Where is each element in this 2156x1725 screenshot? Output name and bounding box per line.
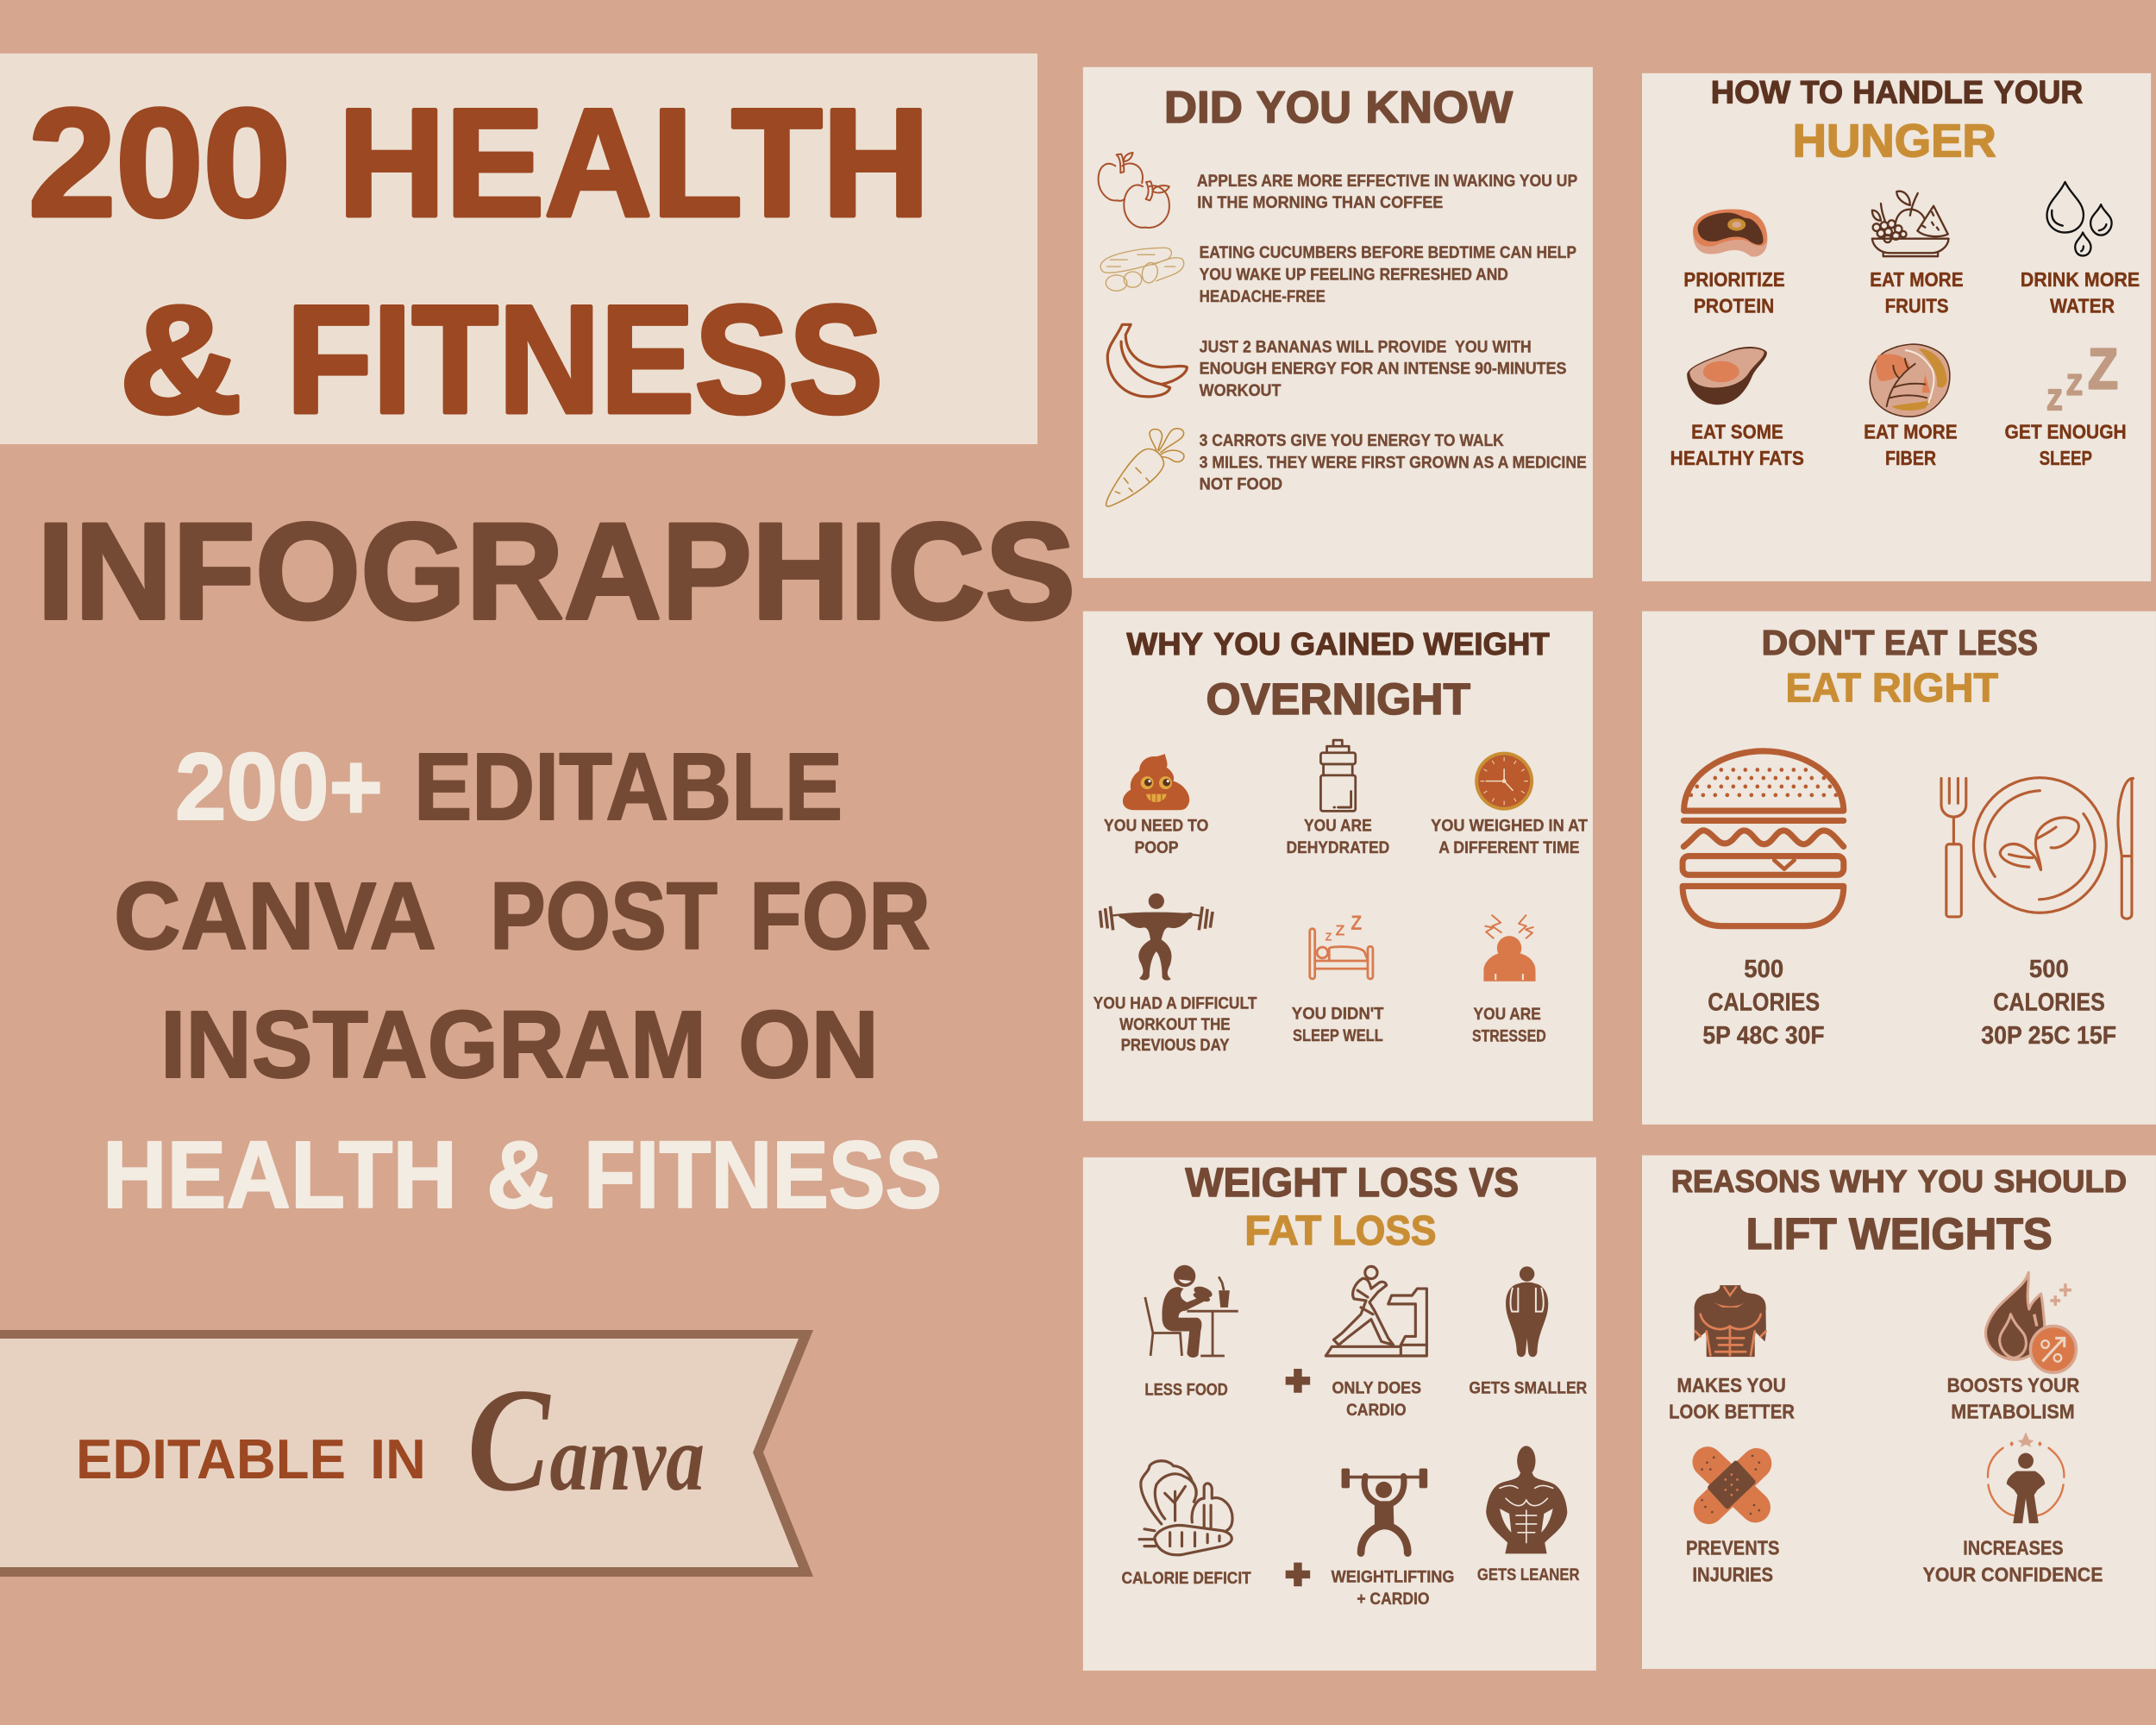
label: weightlifting + cardio — [1332, 1568, 1454, 1609]
panel: did you know — [1083, 67, 1593, 578]
text: bananas fact: WORKOUT — [1200, 381, 1282, 400]
panel heading: YOU — [1213, 626, 1281, 662]
title line 1: HEALTH — [338, 77, 930, 248]
icon: weightlifter — [1342, 1468, 1427, 1553]
label: you are stressed: YOU ARE — [1474, 1005, 1541, 1024]
label: boosts your metabolism: METABOLISM — [1951, 1401, 2075, 1423]
editable in label: EDITABLE — [76, 1427, 346, 1490]
subheading line 2 — [114, 863, 931, 969]
icon: person eating — [1145, 1265, 1238, 1358]
panel heading: DID — [1164, 83, 1243, 133]
subheading line 2: POST — [490, 863, 718, 969]
label: get enough sleep: GET ENOUGH — [2005, 420, 2127, 442]
icon: water bottle — [1320, 740, 1356, 811]
label: only does cardio — [1332, 1378, 1421, 1420]
panel heading: EAT — [1884, 624, 1947, 662]
panel heading: WEIGHT — [1185, 1160, 1346, 1206]
label: prevents injuries: PREVENTS — [1686, 1536, 1779, 1559]
label: less food: LESS FOOD — [1144, 1380, 1228, 1399]
text: burger calories: 500 — [1744, 956, 1783, 983]
label: you are dehydrated: DEHYDRATED — [1286, 838, 1389, 857]
text: cucumbers fact: YOU WAKE UP FEELING REFRESHED AND — [1200, 266, 1508, 285]
text: burger calories: 5P 48C 30F — [1702, 1022, 1825, 1050]
icon: carrot — [1106, 429, 1184, 506]
text: carrots fact: 3 MILES. THEY WERE FIRST GROWN AS A MEDICINE — [1200, 453, 1587, 472]
icon: vegetables — [1139, 1461, 1232, 1555]
panel heading: YOU — [1257, 83, 1351, 133]
icon: apples — [1099, 153, 1169, 228]
panel heading: SHOULD — [1994, 1164, 2127, 1199]
subheading line 4: HEALTH — [103, 1122, 457, 1228]
label: drink more water — [2021, 268, 2140, 317]
icon: plus — [1286, 1563, 1310, 1586]
label: increases your confidence: INCREASES — [1963, 1536, 2064, 1559]
panel highlight heading — [1785, 664, 1998, 711]
label: prevents injuries — [1686, 1536, 1779, 1585]
panel: reasons why you should lift weights — [1642, 1155, 2156, 1669]
panel background — [1642, 1155, 2156, 1669]
panel heading — [1671, 1164, 2127, 1199]
label: prioritize protein: PROTEIN — [1694, 294, 1774, 317]
text: burger calories: CALORIES — [1708, 988, 1820, 1016]
label: increases your confidence: YOUR CONFIDENCE — [1923, 1563, 2103, 1585]
label: you are stressed: STRESSED — [1472, 1026, 1546, 1045]
panel heading: HANDLE — [1852, 74, 1984, 110]
panel highlight heading: FAT — [1244, 1208, 1321, 1254]
panel heading: WHY — [1126, 626, 1203, 662]
panel heading — [1711, 74, 2083, 110]
icon: sleep zzz: Z — [2047, 384, 2062, 416]
icon: bed: Z — [1326, 932, 1332, 944]
ribbon border — [0, 1330, 813, 1577]
subheading line 4: FITNESS — [584, 1122, 942, 1228]
panel heading: REASONS — [1671, 1164, 1821, 1199]
icon: bananas — [1107, 324, 1187, 397]
label: gets leaner: GETS LEANER — [1477, 1565, 1580, 1584]
title line 1 — [28, 77, 930, 248]
subheading line 4: & — [486, 1122, 555, 1228]
panel highlight heading: HUNGER — [1793, 116, 1996, 166]
panel background — [1642, 612, 2156, 1125]
text: plate calories: CALORIES — [1993, 988, 2105, 1016]
label: eat more fiber — [1864, 420, 1958, 469]
icon: stressed person — [1483, 915, 1536, 982]
subheading line 1: 200+ — [175, 734, 383, 840]
icon: flame metabolism — [1986, 1273, 2076, 1372]
icon: weightlifter — [1100, 894, 1213, 981]
icon: bed: Z — [1351, 913, 1362, 935]
text: cucumbers fact: HEADACHE-FREE — [1200, 287, 1326, 306]
icon: plate and cutlery — [1941, 778, 2134, 919]
label: prioritize protein: PRIORITIZE — [1683, 268, 1785, 291]
subheading line 2: CANVA — [114, 863, 436, 969]
label: eat more fruits: EAT MORE — [1870, 268, 1964, 291]
label: eat some healthy fats: EAT SOME — [1691, 420, 1783, 442]
panel highlight heading — [1746, 1208, 2053, 1258]
text: plate calories — [1981, 956, 2116, 1050]
panel highlight heading: EAT — [1785, 664, 1861, 711]
icon: fruit bowl — [1872, 191, 1949, 256]
text: bananas fact: ENOUGH ENERGY FOR AN INTENSE 90-MINUTES — [1200, 360, 1567, 379]
ribbon: editable in canva — [0, 1330, 813, 1577]
text: apples fact: APPLES ARE MORE EFFECTIVE IN WAKING YOU UP — [1197, 172, 1577, 191]
subheading line 3: INSTAGRAM — [160, 992, 706, 1098]
panel heading: YOUR — [1994, 74, 2083, 110]
title panel — [0, 53, 1037, 444]
panel heading: TO — [1801, 74, 1843, 110]
panel heading: WEIGHT — [1423, 626, 1550, 662]
label: you had a difficult workout — [1094, 995, 1257, 1055]
text: plate calories: 500 — [2029, 956, 2069, 983]
panel highlight heading: RIGHT — [1872, 664, 1998, 711]
canva wordmark: Canva — [467, 1358, 705, 1522]
icon: sleep zzz — [2047, 337, 2118, 416]
panel heading: LESS — [1958, 624, 2038, 662]
subheading line 1 — [175, 734, 843, 840]
text: bananas fact: JUST 2 BANANAS WILL PROVIDE YOU WITH — [1200, 337, 1532, 356]
label: you had a difficult workout: PREVIOUS DAY — [1121, 1037, 1230, 1055]
subheading line 1: EDITABLE — [414, 734, 843, 840]
panel: weight loss vs fat loss — [1083, 1157, 1596, 1671]
label: you didn't sleep well: YOU DIDN'T — [1292, 1005, 1384, 1024]
title block: 200 health and fitness — [0, 53, 1037, 445]
text: cucumbers fact: EATING CUCUMBERS BEFORE BEDTIME CAN HELP — [1200, 243, 1576, 262]
label: makes you look better — [1669, 1374, 1795, 1423]
label: you weighed in at a different time: A DIFFERENT TIME — [1438, 838, 1580, 857]
subheading line 2: FOR — [749, 863, 931, 969]
panel highlight heading: WEIGHTS — [1849, 1208, 2053, 1258]
text: carrots fact: NOT FOOD — [1200, 475, 1282, 494]
label: makes you look better: LOOK BETTER — [1669, 1401, 1795, 1423]
label: you are stressed — [1472, 1005, 1546, 1045]
icon: water drops — [2047, 182, 2112, 255]
label: gets smaller: GETS SMALLER — [1469, 1378, 1587, 1397]
icon: person gets smaller — [1506, 1266, 1548, 1357]
label: you are dehydrated: YOU ARE — [1304, 817, 1372, 836]
label: eat more fruits: FRUITS — [1885, 294, 1949, 317]
subheading block — [103, 734, 942, 1228]
panel heading: DON'T — [1761, 624, 1875, 662]
panel heading: KNOW — [1365, 83, 1514, 133]
label: you need to poop: POOP — [1135, 838, 1179, 857]
panel background — [1083, 1157, 1596, 1671]
icon: avocado — [1687, 347, 1767, 405]
label: weightlifting + cardio: WEIGHTLIFTING — [1332, 1568, 1454, 1587]
panel heading: LOSS — [1357, 1160, 1458, 1206]
icon: steak — [1693, 210, 1767, 257]
panel highlight heading — [1244, 1208, 1436, 1254]
label: prioritize protein — [1683, 268, 1785, 317]
text: plate calories: 30P 25C 15F — [1981, 1022, 2116, 1050]
panel heading: GAINED — [1290, 626, 1414, 662]
label: get enough sleep — [2005, 420, 2127, 469]
subheading line 3: ON — [738, 992, 879, 1098]
ribbon shape — [0, 1334, 805, 1572]
text: carrots fact: 3 CARROTS GIVE YOU ENERGY TO WALK — [1200, 431, 1504, 450]
heading: infographics: INFOGRAPHICS — [37, 494, 1075, 648]
label: only does cardio: CARDIO — [1346, 1401, 1407, 1420]
label: only does cardio: ONLY DOES — [1332, 1378, 1421, 1397]
panel: don't eat less eat right — [1642, 612, 2156, 1125]
title line 1: 200 — [28, 77, 291, 248]
title line 2: FITNESS — [286, 273, 883, 445]
icon: poop — [1123, 754, 1189, 810]
icon: cabbage — [1870, 344, 1950, 417]
panel heading — [1126, 626, 1550, 662]
label: eat more fiber: EAT MORE — [1864, 420, 1958, 442]
panel heading: VS — [1469, 1160, 1519, 1206]
label: boosts your metabolism — [1947, 1374, 2079, 1423]
panel heading: HOW — [1711, 74, 1791, 110]
label: you need to poop: YOU NEED TO — [1104, 817, 1208, 836]
icon: cucumbers — [1100, 248, 1184, 291]
label: drink more water: DRINK MORE — [2021, 268, 2140, 291]
text: apples fact — [1197, 172, 1577, 212]
panel: how to handle your hunger — [1642, 73, 2151, 581]
panel highlight heading: LIFT — [1746, 1208, 1837, 1258]
label: you had a difficult workout: YOU HAD A DIFFICULT — [1094, 995, 1257, 1013]
label: you had a difficult workout: WORKOUT THE — [1119, 1016, 1231, 1034]
icon: crossed bandages — [1686, 1440, 1778, 1530]
text: carrots fact — [1200, 431, 1587, 494]
label: boosts your metabolism: BOOSTS YOUR — [1947, 1374, 2079, 1396]
icon: sleep zzz: Z — [2066, 368, 2082, 400]
text: burger calories — [1702, 956, 1825, 1050]
panel background — [1642, 73, 2151, 581]
label: weightlifting + cardio: + CARDIO — [1357, 1590, 1430, 1609]
label: you weighed in at a different time: YOU WEIGHED IN AT — [1431, 817, 1588, 836]
panel heading: YOU — [1918, 1164, 1984, 1199]
icon: muscular torso — [1695, 1285, 1766, 1357]
panel: why you gained weight overnight — [1083, 612, 1593, 1121]
icon: plus — [1286, 1369, 1310, 1393]
panel background — [1083, 67, 1593, 578]
icon: confident person — [1988, 1433, 2064, 1523]
panel background — [1083, 612, 1593, 1121]
label: eat some healthy fats: HEALTHY FATS — [1670, 447, 1804, 469]
panel heading — [1185, 1160, 1519, 1206]
label: makes you look better: MAKES YOU — [1677, 1374, 1786, 1396]
icon: bed: Z — [1335, 922, 1345, 939]
editable in label: IN — [370, 1427, 426, 1490]
text: bananas fact — [1200, 337, 1567, 400]
panel heading — [1761, 624, 2038, 662]
label: you need to poop — [1104, 817, 1208, 857]
label: get enough sleep: SLEEP — [2040, 447, 2092, 469]
label: calorie deficit: CALORIE DEFICIT — [1121, 1569, 1251, 1588]
label: you weighed in at a different time — [1431, 817, 1588, 857]
label: eat more fiber: FIBER — [1885, 447, 1936, 469]
icon: clock — [1475, 752, 1533, 811]
label: eat some healthy fats — [1670, 420, 1804, 469]
label: increases your confidence — [1923, 1536, 2103, 1585]
text: apples fact: IN THE MORNING THAN COFFEE — [1197, 193, 1443, 212]
icon: bed — [1310, 913, 1373, 979]
label: you are dehydrated — [1286, 817, 1389, 857]
label: eat more fruits — [1870, 268, 1964, 317]
icon: muscular man — [1486, 1446, 1567, 1553]
panel highlight heading: LOSS — [1332, 1208, 1436, 1254]
panel heading — [1164, 83, 1514, 133]
icon: treadmill runner — [1326, 1266, 1426, 1356]
label: you didn't sleep well: SLEEP WELL — [1293, 1026, 1383, 1045]
subheading line 4 — [103, 1122, 942, 1228]
icon: burger — [1683, 751, 1844, 926]
text: cucumbers fact — [1200, 243, 1576, 306]
icon: sleep zzz: Z — [2088, 337, 2118, 401]
panel heading: WHY — [1830, 1164, 1908, 1199]
title line 2: & — [119, 273, 242, 445]
label: drink more water: WATER — [2050, 294, 2115, 317]
panel highlight heading: OVERNIGHT — [1206, 674, 1470, 724]
label: you didn't sleep well — [1292, 1005, 1384, 1045]
label: prevents injuries: INJURIES — [1692, 1563, 1773, 1585]
